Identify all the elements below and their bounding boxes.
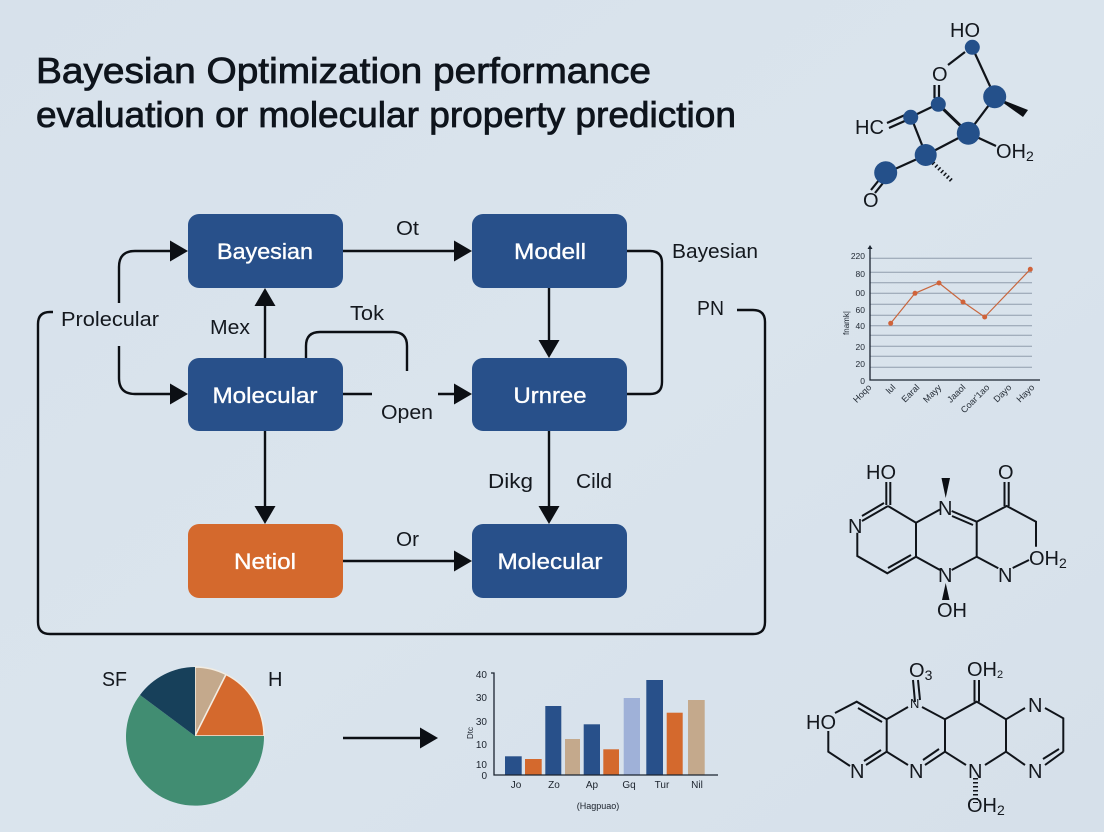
line chart: Earal <box>899 382 921 404</box>
bar chart: Jo <box>511 780 522 791</box>
molecule: top: HO <box>950 20 980 42</box>
bar chart: Zo <box>548 780 560 791</box>
molecule: bottom: N <box>909 761 923 783</box>
molecule: bottom: OH <box>967 659 997 681</box>
flow labels: Cild <box>576 471 612 493</box>
bar chart: 0 <box>481 771 487 782</box>
flow labels: Or <box>396 529 419 551</box>
node: Bayesian <box>188 214 343 288</box>
bar chart: 10 <box>476 760 487 771</box>
molecule: bottom <box>806 659 1063 818</box>
molecule: bottom: N <box>1028 695 1042 717</box>
bar chart: (Hagpuao) <box>577 801 619 811</box>
node: Urnree <box>472 358 627 431</box>
molecule: bottom: N <box>850 761 864 783</box>
flow labels: Ot <box>396 218 419 240</box>
line chart: Coar'1ao <box>959 382 991 415</box>
molecule: top: O <box>932 64 948 86</box>
flowchart <box>38 214 765 634</box>
title: evaluation or molecular property prediction <box>36 94 736 135</box>
line chart: 20 <box>856 342 865 352</box>
pie chart: H <box>268 669 282 691</box>
molecule: middle: OH <box>937 600 967 622</box>
molecule: middle: HO <box>866 462 896 484</box>
line chart <box>842 245 1040 415</box>
bar chart <box>466 670 718 811</box>
molecule: bottom: OH <box>967 795 997 817</box>
molecule: top: 2 <box>1026 148 1034 164</box>
molecule: top: OH <box>996 141 1026 163</box>
molecule: middle: O <box>998 462 1014 484</box>
molecule: bottom: N <box>910 696 919 711</box>
flow labels: Mex <box>210 317 250 339</box>
line chart: 80 <box>856 269 865 279</box>
node: Bayesian: Bayesian <box>217 239 313 264</box>
bar chart: Nil <box>691 780 703 791</box>
node: Urnree: Urnree <box>514 383 586 408</box>
molecule: bottom: N <box>968 761 982 783</box>
node: Molecular <box>188 358 343 431</box>
molecule: top: O <box>863 190 879 212</box>
line chart: 20 <box>856 359 865 369</box>
bar chart: Dtc <box>466 727 475 739</box>
molecule: top <box>855 20 1034 212</box>
molecule: middle: N <box>998 565 1012 587</box>
node: Molecular: Molecular <box>212 383 318 408</box>
bar chart: 30 <box>476 717 487 728</box>
bar chart: 10 <box>476 740 487 751</box>
bar chart: Tur <box>655 780 670 791</box>
molecule: bottom: 2 <box>997 669 1003 681</box>
flow labels: Tok <box>350 303 385 325</box>
line chart: Hoqo <box>851 382 873 405</box>
line chart: 220 <box>851 251 865 261</box>
node: Modell: Modell <box>514 239 586 264</box>
line chart: 0 <box>860 376 865 386</box>
node: Modell <box>472 214 627 288</box>
bar chart: Gq <box>622 780 636 791</box>
molecule: bottom: 3 <box>925 667 933 683</box>
flow labels: Prolecular <box>61 309 159 331</box>
molecule: middle: N <box>938 498 952 520</box>
title: Bayesian Optimization performance <box>36 50 651 91</box>
molecule: bottom: 2 <box>997 802 1005 818</box>
molecule: bottom: N <box>1028 761 1042 783</box>
line chart: 60 <box>856 305 865 315</box>
molecule: middle <box>848 462 1067 622</box>
node: Molecular lower: Molecular <box>498 549 602 574</box>
node: Molecular lower <box>472 524 627 598</box>
flow labels: Dikg <box>488 471 533 493</box>
bar chart: 40 <box>476 670 487 681</box>
bar chart: 30 <box>476 693 487 704</box>
line chart: 40 <box>856 321 865 331</box>
title <box>36 50 736 135</box>
line chart: fnamk| <box>842 311 851 335</box>
molecule: bottom: O <box>909 660 925 682</box>
bar chart: Ap <box>586 780 599 791</box>
molecule: middle: OH <box>1029 548 1059 570</box>
molecule: middle: N <box>848 516 862 538</box>
molecule: middle: N <box>938 565 952 587</box>
line chart: 00 <box>856 288 865 298</box>
pie chart <box>102 667 282 806</box>
flow labels: PN <box>697 298 724 320</box>
line chart: Hayo <box>1014 382 1036 404</box>
line chart: Mayy <box>921 382 944 405</box>
pie chart: SF <box>102 669 127 691</box>
flow labels: Open <box>381 402 433 424</box>
line chart: Dayo <box>991 382 1013 404</box>
connectors and arrows <box>38 251 765 634</box>
line chart: Jaaol <box>945 382 967 405</box>
node: Netiol <box>188 524 343 598</box>
arrow: pie to bar chart <box>343 728 438 748</box>
molecule: middle: 2 <box>1059 555 1067 571</box>
flow labels: Bayesian <box>672 241 758 263</box>
flow labels <box>61 218 758 551</box>
molecule: top: HC <box>855 117 884 139</box>
line chart: lul <box>884 382 897 396</box>
node: Netiol: Netiol <box>234 549 296 574</box>
molecule: bottom: HO <box>806 712 836 734</box>
